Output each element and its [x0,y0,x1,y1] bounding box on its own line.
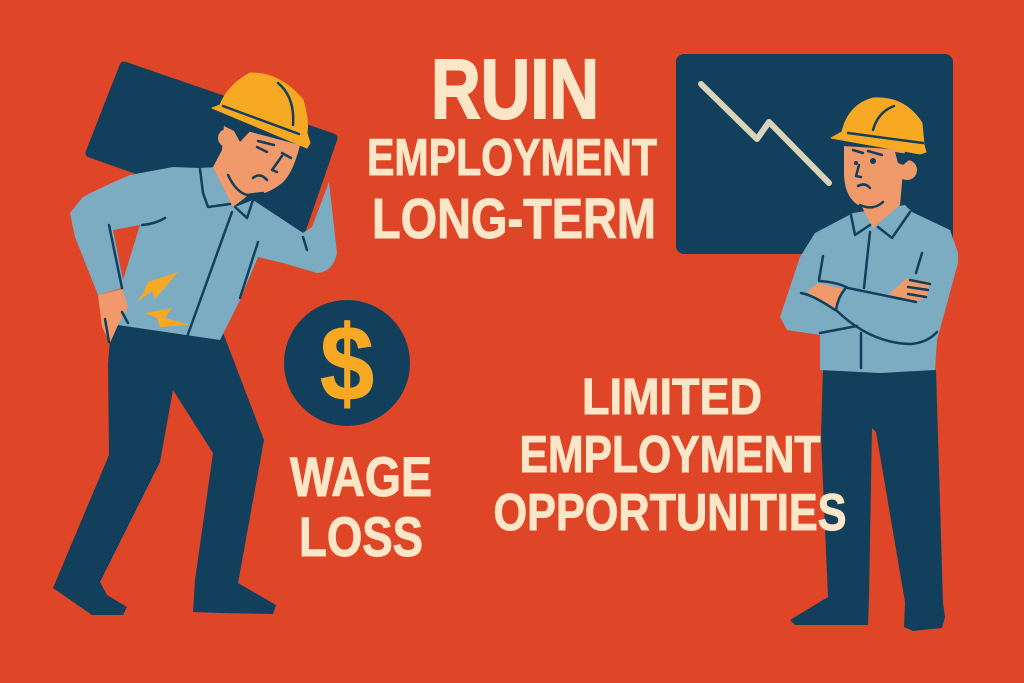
trousers and boots [53,318,276,615]
crossed hands [807,278,930,308]
shirt [70,167,337,340]
trousers and boots [790,368,945,631]
face details [228,141,291,195]
pain bolts [137,272,190,327]
heading: ruin employment long-term: EMPLOYMENT [367,129,657,187]
label: limited employment opportunities: OPPORTUNITIES [494,484,846,542]
figure: worker with crossed arms [780,98,958,631]
heading: ruin employment long-term: LONG-TERM [372,187,656,251]
chart panel: falling line [676,54,953,254]
hard hat [212,73,310,148]
gap between arm and torso [113,225,140,280]
ear [897,160,917,180]
hat lines [223,83,299,134]
neck and face [844,146,905,228]
hat lines [848,106,923,143]
icon: dollar coin: $ [320,303,374,423]
eyes [854,158,876,165]
heading: ruin employment long-term: RUIN [431,42,599,136]
face details [853,150,883,207]
label: limited employment opportunities: LIMITED [582,368,762,425]
label: wage loss: LOSS [299,505,423,568]
hair [222,125,253,142]
hair [895,152,915,165]
neck and face [213,125,300,207]
hand on hip [98,289,133,343]
shirt [780,205,958,373]
shirt lines [105,169,307,342]
icon: dollar coin [284,300,410,426]
heavy load [90,66,333,228]
label: limited employment opportunities: EMPLOYMENT [520,426,821,484]
ear [218,129,236,147]
figure: injured worker carrying load [53,66,337,615]
hard hat [831,98,926,154]
heading: ruin employment long-term [367,42,657,251]
label: wage loss [290,445,432,568]
shirt and arm lines [801,212,937,368]
label: wage loss: WAGE [290,445,432,508]
label: limited employment opportunities [494,368,846,542]
